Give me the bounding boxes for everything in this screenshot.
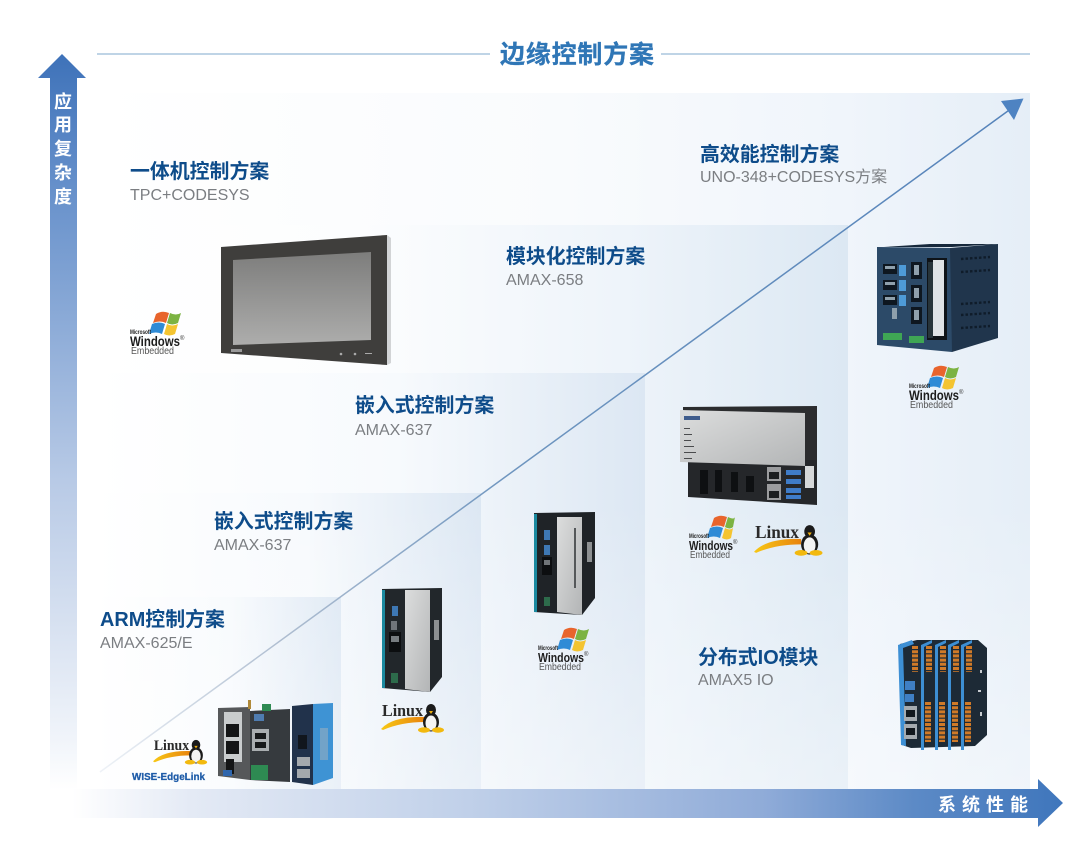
label: all-in-one solution: TPC+CODESYS bbox=[130, 187, 250, 204]
panel: embedded tier upper bbox=[97, 373, 645, 790]
icon: Linux logo: Linux bbox=[154, 738, 190, 754]
icon: Linux logo bbox=[381, 701, 444, 733]
title: 边缘控制方案 bbox=[500, 40, 655, 69]
arrow: application complexity axis: 用 bbox=[54, 115, 72, 135]
icon: Windows Embedded logo bbox=[689, 516, 738, 561]
label: modular solution: AMAX-658 bbox=[506, 272, 583, 289]
arrow: application complexity axis: 度 bbox=[54, 187, 72, 207]
device: AMAX-658 controller bbox=[680, 406, 817, 505]
icon: Windows Embedded logo: Windows bbox=[538, 650, 584, 665]
label: embedded solution upper: 嵌入式控制方案 bbox=[355, 393, 494, 417]
label: embedded solution lower: 嵌入式控制方案 bbox=[214, 509, 353, 533]
label: ARM solution: AMAX-625/E bbox=[100, 635, 192, 652]
icon: Linux logo: Linux bbox=[755, 522, 799, 542]
icon: Windows Embedded logo: Microsoft bbox=[538, 646, 558, 652]
icon: Windows Embedded logo bbox=[130, 312, 185, 357]
icon: Windows Embedded logo: Microsoft bbox=[909, 384, 930, 390]
icon: Windows Embedded logo: Microsoft bbox=[130, 330, 151, 336]
label: embedded solution upper bbox=[355, 393, 494, 439]
icon: Windows Embedded logo: ® bbox=[180, 335, 185, 342]
label: modular solution: 模块化控制方案 bbox=[506, 244, 645, 268]
label: embedded solution lower: AMAX-637 bbox=[214, 537, 291, 554]
label: embedded solution upper: AMAX-637 bbox=[355, 422, 432, 439]
icon: Windows Embedded logo: Windows bbox=[909, 387, 959, 403]
panel: ARM tier bbox=[97, 597, 341, 790]
label: distributed IO bbox=[698, 646, 819, 689]
icon: Windows Embedded logo bbox=[909, 366, 964, 411]
label: modular solution bbox=[506, 244, 645, 289]
label: all-in-one solution: 一体机控制方案 bbox=[130, 159, 269, 183]
device: AMAX-637 controller lower bbox=[382, 588, 442, 692]
icon: Windows Embedded logo: ® bbox=[959, 389, 964, 396]
panel: high performance tier bbox=[100, 93, 1030, 790]
label: high performance solution bbox=[700, 142, 887, 186]
label: ARM solution: ARM控制方案 bbox=[100, 607, 225, 631]
arrow: system performance axis bbox=[72, 779, 1063, 827]
icon: Windows Embedded logo: ® bbox=[733, 539, 738, 546]
icon: Linux logo bbox=[754, 522, 822, 556]
panel: modular tier bbox=[97, 225, 848, 790]
icon: Windows Embedded logo bbox=[538, 628, 589, 673]
device: AMAX-625/E modules bbox=[218, 700, 333, 785]
label: all-in-one solution bbox=[130, 159, 269, 204]
icon: Windows Embedded logo: Windows bbox=[689, 538, 733, 553]
panel: embedded tier lower bbox=[97, 493, 481, 790]
icon: Linux logo: Linux bbox=[382, 701, 423, 720]
arrow: application complexity axis bbox=[38, 54, 86, 790]
arrow: application complexity axis: 杂 bbox=[54, 163, 72, 183]
device: AMAX5 IO modules bbox=[898, 640, 987, 750]
icon: Windows Embedded logo: Microsoft bbox=[689, 534, 709, 540]
device: TPC panel computer bbox=[221, 235, 391, 365]
icon: Windows Embedded logo: ® bbox=[584, 651, 589, 658]
label: high performance solution: 高效能控制方案 bbox=[700, 142, 839, 166]
label: distributed IO: AMAX5 IO bbox=[698, 672, 774, 689]
device: AMAX-637 controller upper bbox=[534, 512, 595, 615]
arrow: application complexity axis: 应 bbox=[54, 91, 72, 112]
icon: Windows Embedded logo: Embedded bbox=[910, 400, 953, 411]
arrow: system performance axis: 系统性能 bbox=[938, 794, 1034, 815]
label: high performance solution: UNO-348+CODESYS方案 bbox=[700, 168, 887, 186]
label: ARM solution bbox=[100, 607, 225, 652]
arrow: diagonal growth line bbox=[100, 98, 1024, 772]
icon: Windows Embedded logo: Embedded bbox=[690, 550, 730, 561]
icon: Windows Embedded logo: Windows bbox=[130, 333, 180, 349]
label: distributed IO: 分布式IO模块 bbox=[698, 646, 819, 669]
label: embedded solution lower bbox=[214, 509, 353, 554]
label: WISE-EdgeLink: WISE-EdgeLink bbox=[132, 771, 205, 783]
arrow: application complexity axis: 复 bbox=[54, 139, 72, 159]
device: UNO-348 controller bbox=[877, 244, 998, 352]
icon: Windows Embedded logo: Embedded bbox=[539, 662, 581, 673]
icon: Windows Embedded logo: Embedded bbox=[131, 346, 174, 357]
icon: Linux logo bbox=[153, 738, 207, 765]
